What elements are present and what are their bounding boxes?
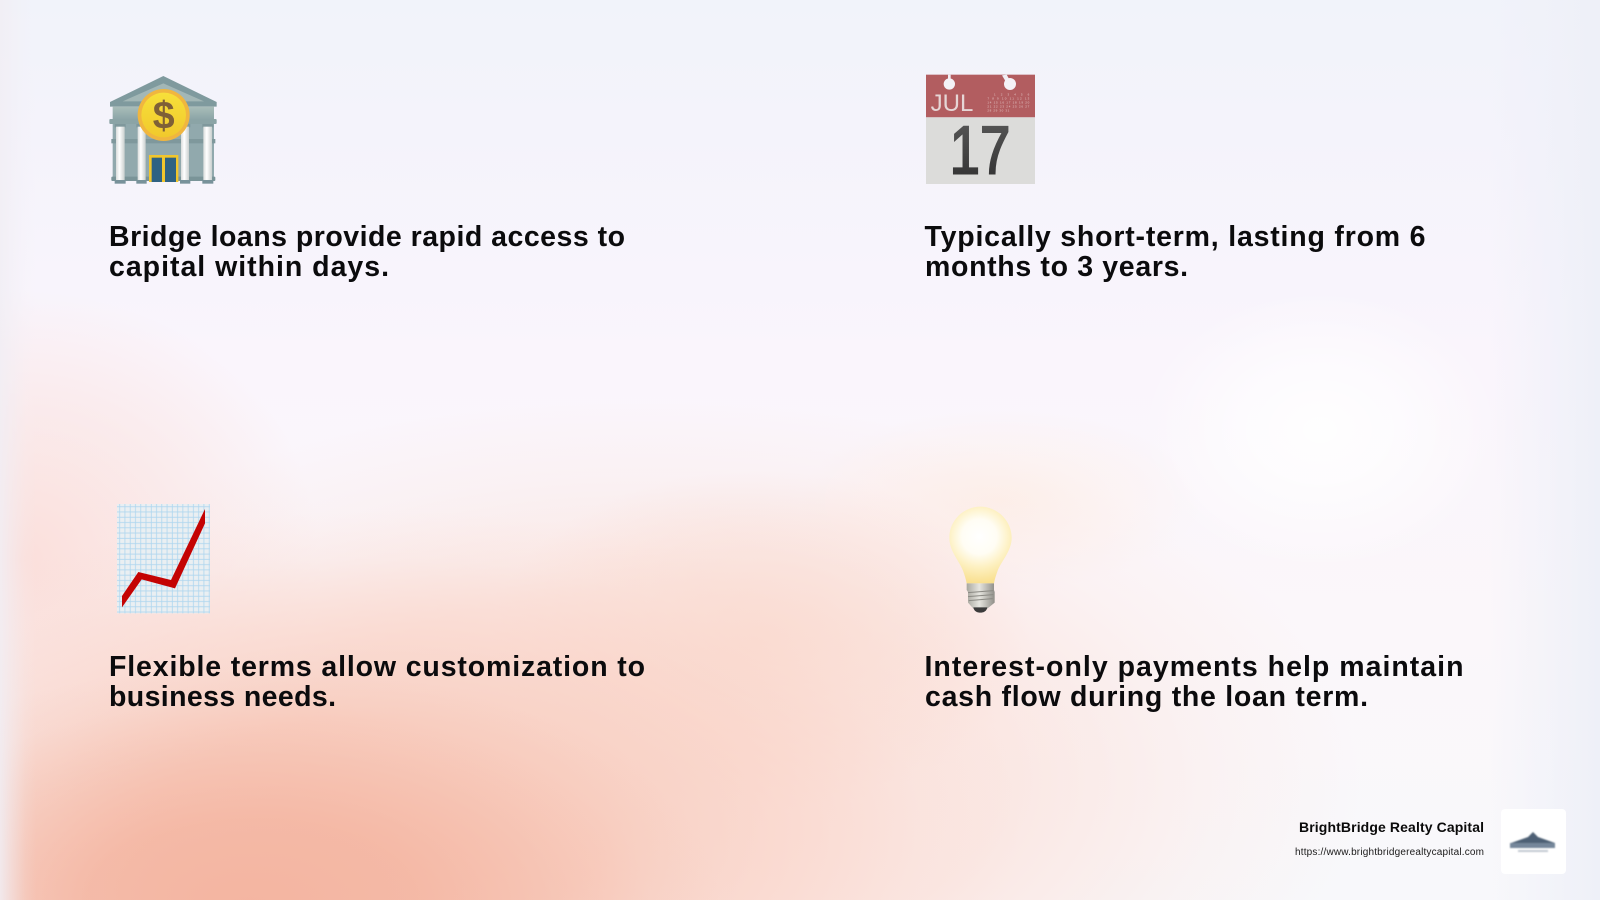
- panel: short term: [924, 75, 1426, 283]
- company url: https://www.brightbridgerealtycapital.com: [1295, 847, 1484, 858]
- text: flexible terms: [109, 651, 645, 713]
- icon: rising chart: [117, 504, 210, 613]
- text: interest only: Interest-only payments help maintain: [924, 651, 1464, 683]
- icon: calendar: 7 8 9 10 11 12 13: [987, 96, 1030, 100]
- icon: bank with dollar coin: [109, 76, 217, 184]
- icon: calendar: 28 29 30 31: [987, 108, 1010, 112]
- logo card: [1501, 809, 1566, 874]
- text: rapid access: [109, 221, 625, 283]
- panel: interest only: [924, 507, 1464, 713]
- icon: light bulb: [949, 507, 1012, 613]
- text: short term: [924, 221, 1426, 283]
- text: interest only: cash flow during the loan term.: [925, 681, 1368, 713]
- icon: calendar: 1 2 3 4 5 6: [994, 92, 1030, 96]
- icon: calendar: 17: [950, 113, 1010, 188]
- text: rapid access: capital within days.: [109, 251, 389, 283]
- company name: BrightBridge Realty Capital: [1299, 819, 1484, 835]
- panel: rapid access: [109, 76, 625, 283]
- icon: calendar: [926, 75, 1035, 188]
- icon: calendar: 21 22 23 24 25 26 27: [987, 104, 1030, 108]
- panel: flexible terms: [109, 504, 645, 713]
- icon: calendar: 14 15 16 17 18 19 20: [987, 100, 1030, 104]
- text: rapid access: Bridge loans provide rapid access to: [109, 221, 625, 253]
- text: flexible terms: Flexible terms allow customization to: [109, 651, 645, 683]
- footer: brand: [1295, 809, 1566, 874]
- icon: bank with dollar coin: $: [153, 94, 175, 138]
- text: short term: Typically short-term, lasting from 6: [924, 221, 1426, 253]
- text: flexible terms: business needs.: [109, 681, 336, 713]
- icon: calendar: JUL: [931, 90, 973, 117]
- text: interest only: [924, 651, 1464, 713]
- text: short term: months to 3 years.: [925, 251, 1188, 283]
